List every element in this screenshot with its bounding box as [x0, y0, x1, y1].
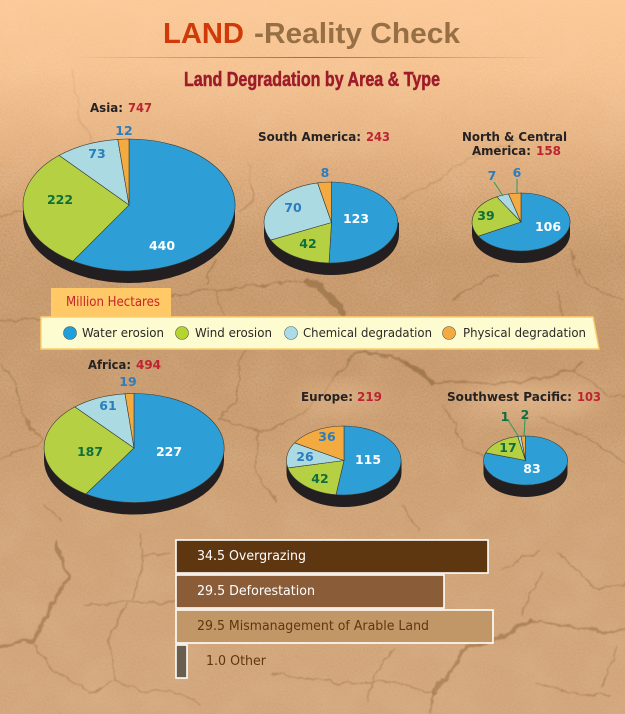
bar chart: causes of land degradation	[176, 540, 493, 678]
title: -Reality Check	[254, 18, 461, 50]
pie chart: Africa	[44, 358, 224, 514]
legend	[41, 288, 599, 349]
bar: deforestation	[176, 575, 444, 608]
pie chart: Asia: 747	[128, 101, 152, 115]
pie chart: South America: 123	[343, 211, 369, 226]
bar: deforestation: 29.5 Deforestation	[197, 584, 315, 599]
pie chart: Asia: 73	[88, 146, 106, 161]
pie chart: Europe: 115	[355, 452, 381, 467]
pie chart: Africa: 494	[136, 358, 161, 372]
pie chart: Europe: 26	[296, 449, 314, 464]
bar: mismanagement of arable land	[176, 610, 493, 643]
pie chart: North and Central America: America:	[472, 144, 531, 158]
pie chart: Southwest Pacific: 1	[501, 409, 509, 424]
pie chart: South America: 243	[366, 130, 390, 144]
pie chart: North and Central America: 106	[535, 219, 561, 234]
pie chart: Africa: 187	[77, 444, 103, 459]
pie chart: Southwest Pacific	[447, 390, 601, 497]
bar: overgrazing: 34.5 Overgrazing	[197, 549, 306, 564]
pie chart: Africa: Africa:	[88, 358, 131, 372]
pie chart: Southwest Pacific: 17	[499, 440, 517, 455]
pie chart: Asia: 12	[115, 123, 133, 138]
bar: overgrazing	[176, 540, 488, 573]
pie chart: Southwest Pacific: 103	[577, 390, 601, 404]
pie chart: North and Central America: North & Central	[462, 130, 567, 144]
pie chart: North and Central America	[462, 130, 570, 263]
title: LAND	[163, 18, 244, 50]
legend item: wind erosion: Wind erosion	[195, 325, 272, 340]
pie chart: North and Central America: 7	[488, 168, 496, 183]
pie chart: South America: South America:	[258, 130, 361, 144]
unit tab: Million Hectares	[66, 295, 160, 310]
pie chart: Asia: 440	[149, 238, 175, 253]
bar: other: 1.0 Other	[206, 654, 267, 669]
pie chart: Southwest Pacific: Southwest Pacific:	[447, 390, 572, 404]
pie chart: Africa: 19	[119, 374, 137, 389]
bar: mismanagement of arable land: 29.5 Mismanagement of Arable Land	[197, 619, 429, 634]
pie chart: South America: 70	[284, 200, 302, 215]
pie chart: South America	[258, 130, 399, 275]
pie chart: North and Central America: 158	[536, 144, 561, 158]
unit tab	[51, 288, 171, 317]
pie chart: Southwest Pacific: 83	[523, 461, 541, 476]
legend item: water erosion: Water erosion	[82, 325, 164, 340]
pie chart: Europe: 42	[311, 471, 329, 486]
pie chart: Southwest Pacific: 2	[521, 407, 529, 422]
pie chart: Europe: Europe:	[301, 390, 353, 404]
title	[163, 18, 461, 50]
legend item: chemical degradation: Chemical degradation	[303, 325, 432, 340]
pie chart: Europe	[286, 390, 402, 507]
pie chart: South America: 8	[321, 165, 329, 180]
pie chart: Europe: 36	[318, 429, 336, 444]
pie chart: North and Central America: 39	[477, 208, 495, 223]
pie chart: Europe: 219	[357, 390, 382, 404]
pie chart: Asia: Asia:	[90, 101, 123, 115]
legend item: physical degradation: Physical degradation	[463, 325, 586, 340]
pie chart: South America: 42	[299, 236, 317, 251]
pie chart: Africa: 227	[156, 444, 182, 459]
pie chart: Asia	[23, 101, 235, 283]
pie chart: Africa: 61	[99, 398, 117, 413]
bar: other	[176, 645, 267, 678]
subtitle: Land Degradation by Area & Type	[184, 69, 440, 91]
pie chart: Asia: 222	[47, 192, 73, 207]
pie chart: North and Central America: 6	[513, 165, 522, 180]
